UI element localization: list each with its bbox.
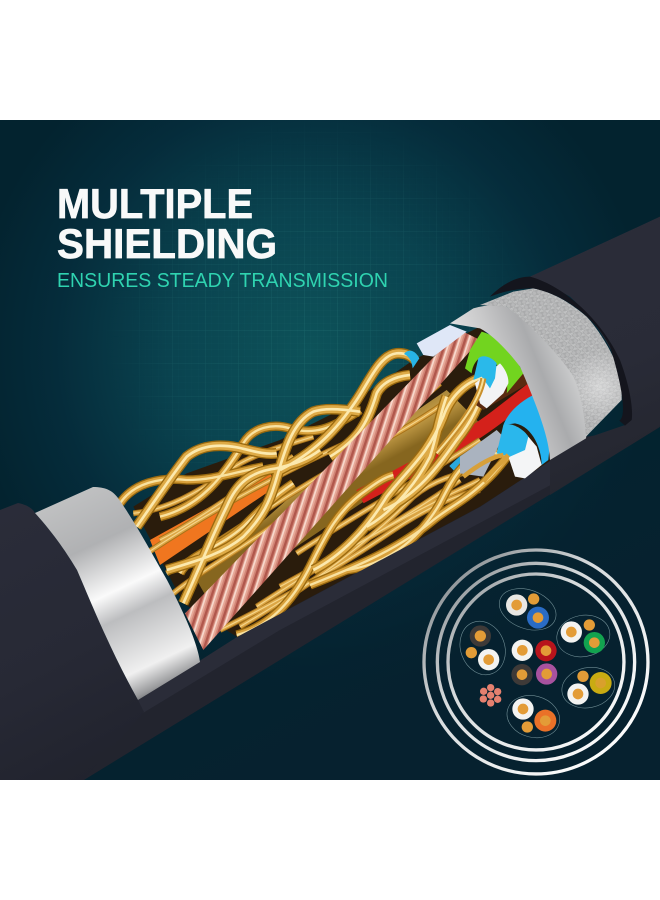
copper braided conductor: [185, 330, 480, 650]
title: MULTIPLE: [57, 180, 253, 227]
dark teal panel: [0, 120, 660, 780]
cable ledge strip: [138, 437, 600, 713]
jacket rim: [490, 277, 632, 426]
subtitle: ENSURES STEADY TRANSMISSION: [57, 270, 388, 292]
front gold strands, right: [313, 377, 487, 570]
interior core: [133, 327, 557, 637]
grey sheath, lower: [460, 430, 503, 477]
title: [57, 180, 277, 267]
left silver band: [35, 487, 200, 700]
cable pairs outlines: [453, 581, 619, 744]
back gold strands, right: [237, 453, 508, 635]
gold shield tape: [197, 390, 480, 603]
shielding rings: [424, 550, 648, 774]
blue sleeve, upper: [473, 356, 497, 388]
jacket, left section: [0, 503, 144, 780]
infographic: multiple shielding cable: [0, 120, 660, 780]
wire bundle, traced in zoomed coordinates: [120, 327, 557, 650]
woven silver band: [480, 288, 622, 437]
front gold strands, left: [137, 353, 415, 603]
dark brown conductor: [473, 373, 532, 410]
pale blue and white insulator: [417, 325, 467, 357]
lower wire tail: [463, 455, 508, 482]
blue sleeve, lower: [497, 424, 528, 457]
thin gold strands: [133, 383, 480, 630]
blue conductor behind: [453, 437, 500, 470]
green insulator: [465, 332, 523, 393]
copper strand cluster: [480, 684, 501, 707]
blue crescent insulator: [503, 393, 550, 465]
jacket, right: [490, 217, 660, 495]
orange conductor: [150, 473, 278, 565]
red conductor: [360, 385, 538, 497]
top blue sleeve: [404, 351, 419, 368]
cable lower jacket: [0, 427, 660, 780]
jacket and bands, right section: [450, 217, 660, 495]
plain silver band: [450, 305, 587, 460]
white insulator, upper: [475, 363, 508, 408]
upper cutaway insulators, traced in zoomed coordinates: [404, 325, 550, 482]
back gold strands, left: [120, 410, 360, 573]
cable: [0, 217, 660, 780]
upper wire tail: [437, 378, 483, 453]
title: SHIELDING: [57, 220, 277, 267]
insulated conductors: [466, 593, 612, 733]
white insulator, lower: [508, 437, 542, 478]
cross-section diagram: [424, 550, 648, 774]
